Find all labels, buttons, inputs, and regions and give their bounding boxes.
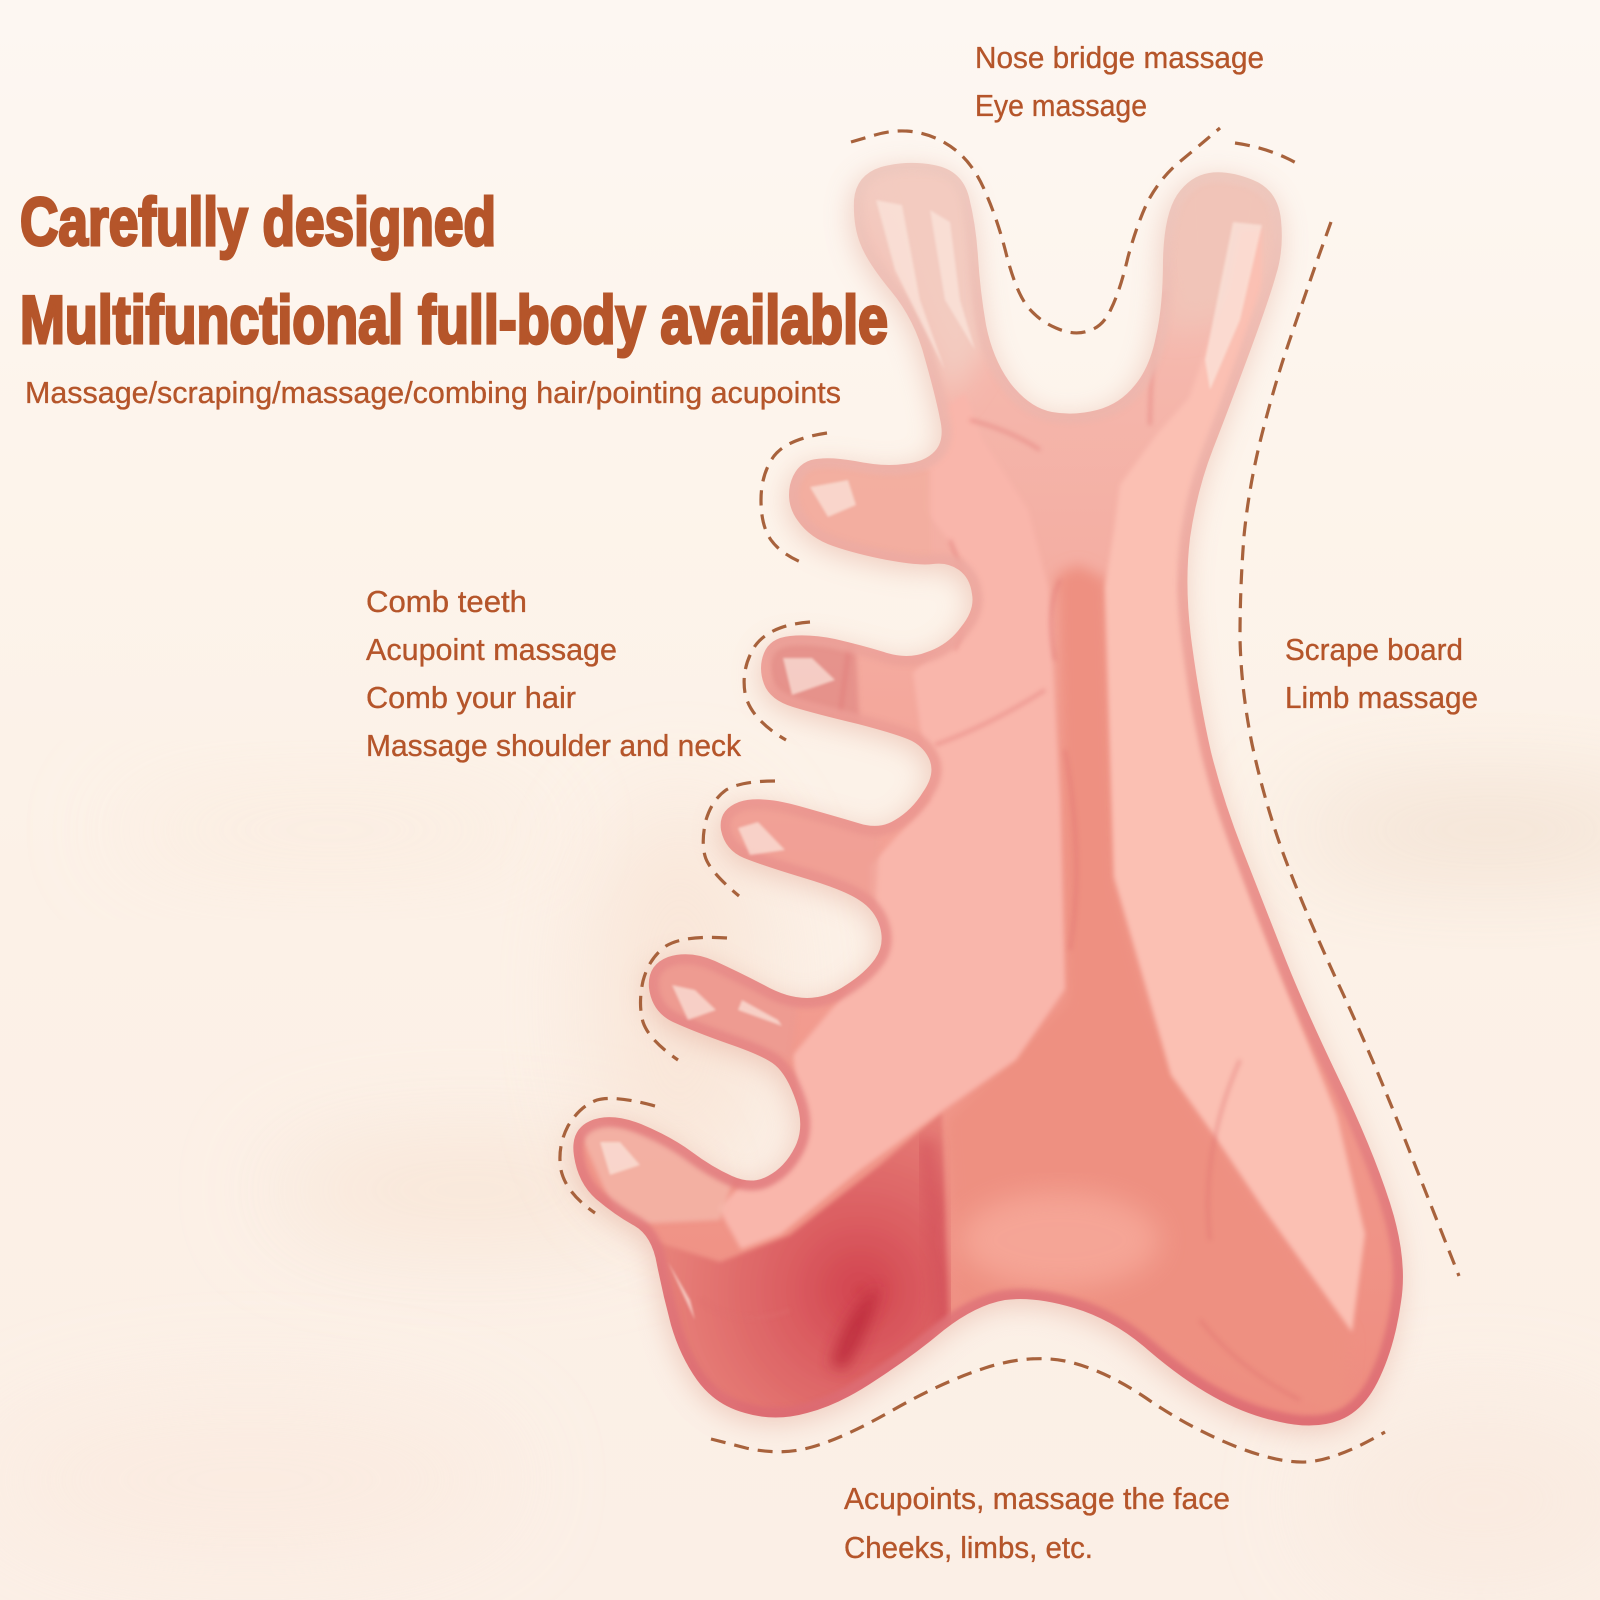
central dark band xyxy=(952,562,1234,1194)
shadow under the board xyxy=(571,169,1401,1432)
label: comb teeth xyxy=(366,584,741,763)
label: scrape board: Limb massage xyxy=(1285,680,1478,715)
dashed outline: bottom edge xyxy=(711,1359,1385,1462)
dashed outline: tooth 2 xyxy=(744,622,810,740)
label: acupoints and face: Cheeks, limbs, etc. xyxy=(844,1530,1093,1565)
label: scrape board xyxy=(1285,632,1478,715)
label: comb teeth: Comb teeth xyxy=(366,584,527,619)
tooth shading xyxy=(570,455,930,1225)
label: scrape board: Scrape board xyxy=(1285,632,1463,667)
title: Carefully designed xyxy=(20,184,496,260)
marble streaks xyxy=(840,375,1288,1394)
label: comb teeth: Massage shoulder and neck xyxy=(366,728,741,763)
dashed outline: scrape board edge xyxy=(1240,222,1459,1276)
right prong tint xyxy=(1216,186,1229,187)
prong and tooth highlights xyxy=(600,200,1262,1320)
rim xyxy=(573,163,1403,1426)
title: Multifunctional full-body available xyxy=(20,282,888,358)
label: comb teeth: Acupoint massage xyxy=(366,632,617,667)
label: acupoints and face xyxy=(844,1481,1230,1565)
label: nose bridge and eye xyxy=(975,40,1264,123)
left light panel xyxy=(721,563,1066,1250)
dashed outline: tooth 5 xyxy=(560,1098,655,1213)
darkest marbled core xyxy=(830,1285,880,1370)
board base colour xyxy=(560,150,1420,1440)
dashed outline: tooth 3 xyxy=(703,781,775,896)
lower-left dark red region xyxy=(662,1114,949,1410)
label: comb teeth: Comb your hair xyxy=(366,680,576,715)
label: nose bridge and eye: Eye massage xyxy=(975,88,1147,123)
right light panel xyxy=(1105,228,1365,1332)
dark seam beside the centre line xyxy=(925,1140,945,1325)
dashed outline: nose bridge and eye prongs xyxy=(851,128,1220,333)
dashed outline: right prong tip xyxy=(1235,143,1298,164)
title xyxy=(20,184,888,358)
dashed outline: tooth 1 xyxy=(761,433,827,564)
dashed outline: tooth 4 xyxy=(640,937,727,1060)
gua sha board xyxy=(560,150,1420,1440)
subtitle: Massage/scraping/massage/combing hair/pointing acupoints xyxy=(25,375,841,410)
left prong tint xyxy=(914,255,981,386)
pale oval in lower centre xyxy=(960,1192,1160,1288)
label: nose bridge and eye: Nose bridge massage xyxy=(975,40,1264,75)
label: acupoints and face: Acupoints, massage the face xyxy=(844,1481,1230,1516)
